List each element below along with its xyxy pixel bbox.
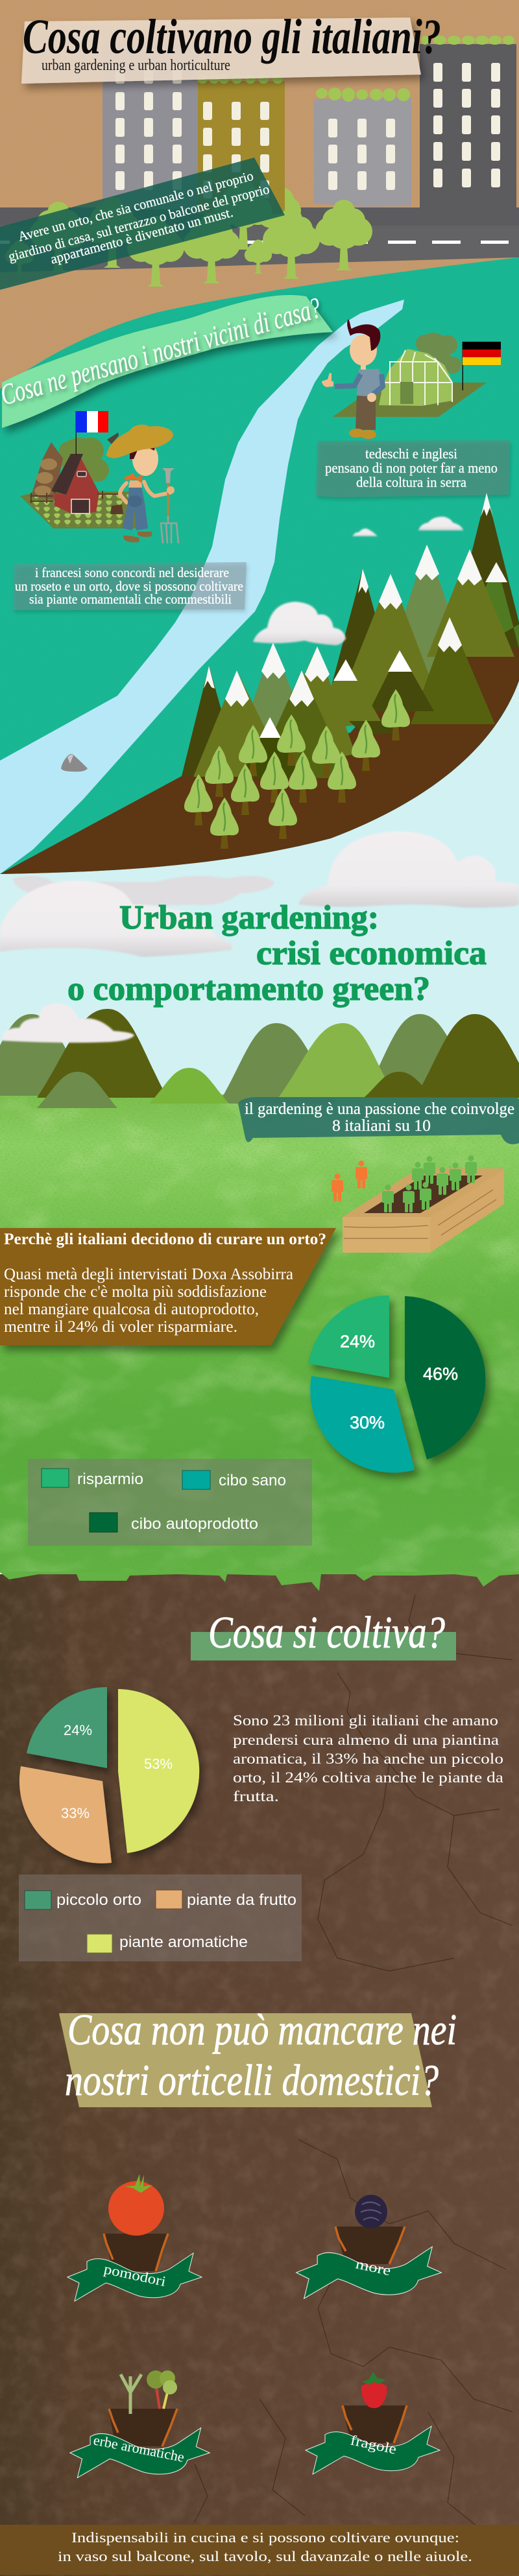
ribbon [306, 2426, 440, 2474]
callout text: i francesi sono concordi nel desiderare [35, 565, 229, 580]
body text: Quasi metà degli intervistati Doxa Assobirra [4, 1266, 293, 1283]
german man [322, 319, 384, 439]
pot [108, 2409, 177, 2446]
heading: urban gardening: crisi economica [256, 935, 487, 972]
lawn [0, 1094, 519, 1591]
body text: risponde che c'è molta più soddisfazione [4, 1283, 267, 1301]
legend piante aromatiche: piante aromatiche [119, 1933, 248, 1951]
arms [120, 482, 170, 502]
item: fragole [306, 2372, 440, 2474]
footer text: in vaso sul balcone, sul tavolo, sul davanzale o nelle aiuole. [58, 2548, 472, 2564]
ground [333, 383, 487, 417]
body text [4, 1266, 293, 1336]
callout text: 8 italiani su 10 [332, 1117, 431, 1135]
river [0, 300, 404, 874]
callout: francesi [13, 562, 247, 610]
pot edges [343, 2405, 407, 2443]
hair [130, 440, 156, 459]
teal speckle [0, 257, 519, 874]
callout text: tedeschi e inglesi [365, 445, 457, 462]
legend cibo autoprodotto: cibo autoprodotto [131, 1515, 258, 1533]
callout text: il gardening è una passione che coinvolge [245, 1100, 514, 1118]
intro text: Avere un orto, che sia comunale o nel proprio [16, 168, 255, 244]
right face [430, 1168, 504, 1253]
ribbon title: Cosa ne pensano i nostri vicini di casa? [0, 291, 324, 412]
heading ribbon: vicini di casa [0, 291, 333, 428]
back peaks [182, 493, 519, 778]
brown box [0, 1228, 336, 1345]
building 3 with roof garden [314, 88, 411, 207]
raised garden bed with people [332, 1155, 504, 1253]
item: pomodori [67, 2174, 202, 2301]
street trees [5, 179, 372, 287]
greenhouse [379, 349, 453, 406]
heading: urban gardening: o comportamento green? [67, 971, 430, 1008]
text block: 23 milioni: aromatica, il 33% ha anche un piccolo [233, 1751, 503, 1767]
value labels: 53% [144, 1756, 173, 1772]
barn roof [51, 454, 83, 495]
legend: cosa si coltiva [19, 1874, 302, 1961]
legend cibo sano [182, 1471, 286, 1489]
mint ribbon [2, 295, 333, 428]
tomato [108, 2174, 164, 2236]
heading: urban gardening: Urban gardening: [119, 899, 379, 936]
callout: tedeschi e inglesi [316, 440, 510, 497]
soil dark texture [0, 1574, 519, 2576]
text block: 23 milioni: Sono 23 milioni gli italiani che amano [233, 1712, 498, 1729]
front face [343, 1217, 430, 1253]
face [350, 335, 377, 366]
item: erbe aromatiche [70, 2370, 210, 2477]
legend piante aromatiche [87, 1933, 248, 1953]
legs and overalls [123, 486, 148, 530]
road upper lane [0, 207, 519, 226]
lawn fill [0, 1094, 519, 1591]
teal landscape [0, 257, 519, 874]
value labels: 24% [64, 1722, 92, 1738]
value labels: 33% [61, 1805, 90, 1821]
footer panel [0, 2525, 519, 2575]
road dashes [0, 241, 509, 244]
pot [342, 2405, 407, 2443]
callout text: pensano di non poter far a meno [325, 460, 498, 476]
herbs: chard [147, 2370, 177, 2409]
tree behind barn [59, 438, 109, 482]
haystack [31, 442, 63, 499]
pie chart: cosa si coltiva [19, 1687, 199, 1863]
callout ribbon [238, 1097, 519, 1144]
text block: 23 milioni: frutta. [233, 1788, 279, 1804]
fence [30, 491, 119, 503]
lawn texture [0, 1096, 519, 1572]
thumbs-up hand [322, 373, 333, 387]
pot [105, 2234, 167, 2271]
soil base [0, 1574, 519, 2576]
herbs: leek [121, 2374, 141, 2414]
pot [335, 2227, 405, 2264]
cardboard speckle [0, 0, 519, 389]
blackberry [355, 2195, 387, 2228]
value labels: 30% [350, 1413, 385, 1432]
intro text panel [0, 158, 285, 290]
pants [356, 396, 376, 430]
text block: 23 milioni: prendersi cura almeno di una piantina [233, 1732, 499, 1748]
grass fringe [0, 1572, 519, 1591]
slice 24% [308, 1295, 389, 1378]
torso [128, 480, 142, 488]
people outside the bed [332, 1161, 367, 1201]
soil light texture [0, 1574, 519, 2576]
mountain landscape [0, 493, 519, 874]
road [0, 207, 519, 272]
title panel [21, 10, 441, 84]
item: more [296, 2195, 441, 2298]
legend: motivazioni [28, 1459, 312, 1546]
callout box [13, 562, 247, 610]
people in the bed [382, 1155, 477, 1212]
heading text: nostri orticelli domestici? [65, 2055, 439, 2105]
ribbon [67, 2253, 202, 2301]
slice 46% [405, 1296, 485, 1459]
pine trees [184, 689, 410, 849]
boots [349, 429, 376, 439]
callout: 8 italiani su 10 [238, 1097, 519, 1144]
cloud on hills [2, 1003, 134, 1043]
pie chart: motivazioni [308, 1295, 485, 1472]
value labels [61, 1722, 173, 1821]
slice 30% [310, 1376, 415, 1472]
pot edges [335, 2227, 405, 2264]
subtitle: urban gardening e urban horticulture [42, 57, 230, 74]
legend piante da frutto [156, 1890, 296, 1909]
building 4 with roof garden [420, 36, 516, 214]
text block: 23 milioni: orto, il 24% coltiva anche le piante da [233, 1769, 503, 1786]
heading text: Cosa si coltiva? [208, 1608, 445, 1658]
bed back rim [343, 1168, 504, 1253]
flag of Germany [462, 342, 501, 390]
intro text: appartamento è diventato un must. [49, 204, 235, 267]
other hand [367, 393, 376, 402]
label: fragole [349, 2431, 398, 2457]
heading band [191, 1632, 456, 1660]
legend risparmio [42, 1469, 143, 1488]
callout text [325, 445, 498, 490]
hill ground [0, 624, 519, 874]
pitchfork [160, 468, 178, 543]
heading band [59, 2013, 432, 2107]
legend piccolo orto [25, 1891, 141, 1909]
legend box [28, 1459, 312, 1546]
legend piccolo orto: piccolo orto [56, 1891, 141, 1909]
intro text: giardino di casa, sul terrazzo o balcone del proprio [6, 181, 271, 265]
sweater [357, 369, 384, 397]
farmer [106, 425, 178, 543]
barn window [77, 471, 86, 477]
body text: mentre il 24% di voler risparmiare. [4, 1318, 237, 1336]
soil cracks [195, 1595, 513, 2529]
distant hills [0, 1009, 519, 1108]
ribbon [70, 2428, 210, 2477]
hand [167, 486, 175, 494]
value labels: 24% [340, 1332, 375, 1351]
sky background [0, 493, 519, 1115]
body text: nel mangiare qualcosa di autoprodotto, [4, 1301, 259, 1318]
background tree [244, 179, 301, 250]
label: erbe aromatiche [92, 2431, 186, 2465]
legend cibo autoprodotto [90, 1513, 258, 1533]
wood lines [344, 1190, 496, 1238]
boots [123, 532, 152, 542]
french farm illustration [20, 411, 178, 543]
footer band [0, 2525, 519, 2575]
building 1 [103, 44, 198, 209]
sleeves [335, 374, 383, 394]
ribbon [296, 2247, 441, 2298]
legend box [19, 1874, 302, 1961]
strawberry [361, 2372, 387, 2408]
pot edges [109, 2409, 177, 2446]
heading: cosa si coltiva [191, 1608, 456, 1660]
barn wall [54, 458, 99, 514]
overall patches [128, 495, 142, 507]
neckerchief [123, 473, 143, 483]
crop rows [27, 494, 138, 526]
bird [107, 432, 119, 444]
soil [364, 1176, 483, 1213]
hair [347, 319, 380, 351]
text block: 23 milioni [233, 1712, 503, 1804]
tree stump [110, 504, 123, 514]
title band [21, 18, 421, 84]
barn door [71, 499, 90, 514]
greenhouse door [400, 382, 413, 404]
cardboard background [0, 0, 519, 493]
slice 53% [118, 1689, 199, 1853]
footer text [58, 2529, 472, 2564]
tree behind [416, 333, 461, 373]
label: more [354, 2255, 392, 2278]
rock [61, 754, 88, 772]
callout text: della coltura in serra [356, 474, 466, 490]
german greenhouse illustration [322, 319, 501, 439]
label: pomodori [103, 2260, 167, 2289]
pot edges [104, 2234, 168, 2271]
callout box [316, 440, 510, 497]
slice 33% [19, 1766, 112, 1863]
neck [361, 363, 366, 370]
haystack blotches [34, 458, 57, 496]
legend cibo sano: cibo sano [219, 1472, 286, 1489]
callout text: un roseto e un orto, dove si possono coltivare [15, 578, 243, 594]
face [132, 442, 158, 476]
legend risparmio: risparmio [77, 1471, 143, 1488]
heading text [65, 2005, 457, 2105]
callout text [245, 1100, 514, 1135]
small clouds [253, 517, 463, 645]
green tilted band [0, 158, 285, 290]
value labels: 46% [423, 1364, 458, 1384]
lawn light patches [0, 1096, 519, 1572]
legend piante da frutto: piante da frutto [187, 1891, 296, 1909]
callout text: sia piante ornamentali che commestibili [29, 591, 232, 607]
flag of France [75, 411, 108, 455]
soil background [0, 1572, 519, 2576]
building 2 with roof garden [197, 75, 285, 214]
ground with crops [20, 491, 138, 528]
heading: cosa non può mancare [59, 2005, 457, 2107]
heading: urban gardening [67, 899, 487, 1008]
question: Perchè gli italiani decidono di curare un orto? [4, 1231, 326, 1248]
slice 24% [27, 1687, 107, 1768]
panel: city scene [0, 36, 519, 287]
panel: perché un orto [0, 1228, 336, 1345]
clouds over sky [0, 831, 519, 957]
straw hat [106, 425, 173, 458]
callout text [15, 565, 243, 607]
value labels [340, 1332, 458, 1432]
footer text: Indispensabili in cucina e si possono coltivare ovunque: [71, 2529, 459, 2546]
